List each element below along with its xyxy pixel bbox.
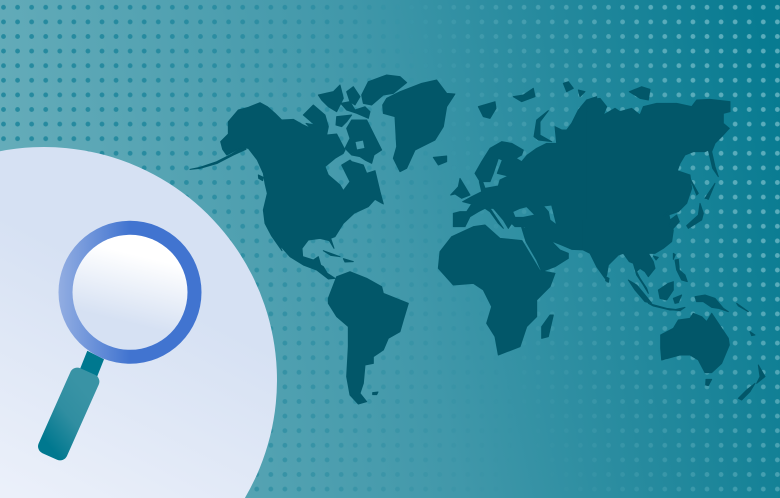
map: New Guinea	[695, 295, 728, 312]
map: Sumatra	[628, 280, 652, 303]
map: Australia	[661, 313, 729, 373]
magnifier neck	[78, 351, 104, 382]
map: Novaya Zemlya	[534, 111, 552, 142]
map: Sakhalin and Kurils	[690, 178, 698, 195]
map: Japan	[687, 203, 703, 228]
map: western Eurasia and Europe	[451, 82, 597, 272]
map: South America	[328, 272, 408, 404]
map: Borneo	[658, 282, 673, 300]
map: Iceland	[433, 156, 447, 165]
map: Sulawesi	[673, 295, 682, 303]
magnifier ring	[58, 221, 202, 364]
map: Java	[648, 303, 680, 310]
magnifier handle	[36, 365, 102, 463]
map: eastern Asia	[587, 87, 730, 233]
map: Svalbard	[478, 102, 496, 118]
map: Great Britain and Ireland	[451, 178, 470, 198]
map: Arctic Canada islands	[318, 75, 407, 163]
map: Greenland	[383, 80, 455, 172]
map: New Zealand	[757, 365, 765, 383]
world map	[190, 75, 765, 404]
map: Americas and Greenland	[190, 75, 455, 404]
map: South and Southeast Asia	[583, 220, 765, 400]
map: Philippines	[675, 259, 687, 282]
map: Sri Lanka	[606, 277, 609, 282]
pale circular panel	[0, 147, 277, 498]
magnifier lens	[72, 235, 188, 350]
icon: magnifying glass	[36, 221, 201, 463]
map: Africa and Madagascar	[438, 225, 555, 355]
